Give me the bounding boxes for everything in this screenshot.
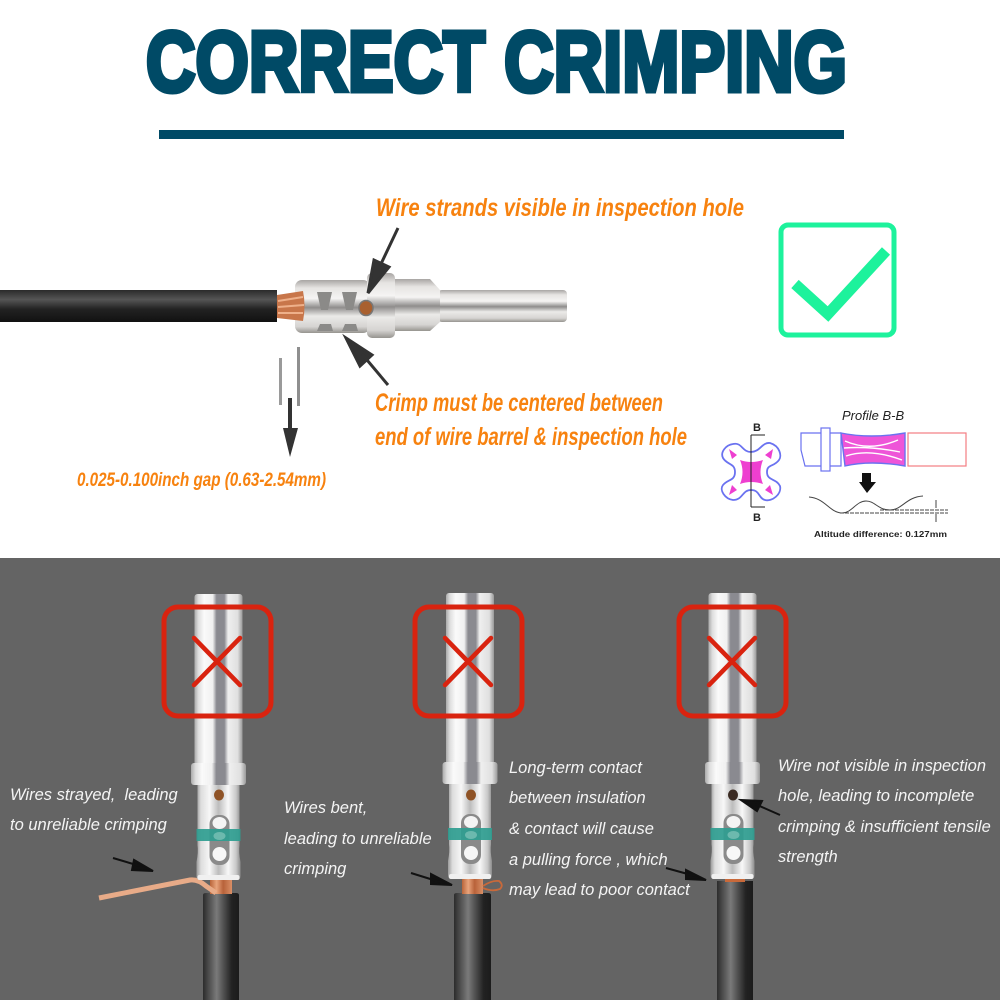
text: long-term contact: between insulation xyxy=(509,789,646,807)
arrow: missing strands xyxy=(741,800,780,815)
diagram: cross section: B xyxy=(753,512,761,524)
example 2: bent wires xyxy=(442,593,502,1000)
text: long-term contact: & contact will cause xyxy=(509,820,654,838)
icon: red cross 3 xyxy=(679,607,786,716)
hole xyxy=(728,790,738,800)
hole xyxy=(466,790,476,800)
pin xyxy=(438,290,567,322)
strands xyxy=(462,878,483,894)
hole xyxy=(214,790,224,800)
strands xyxy=(210,880,232,894)
diagram: down arrow xyxy=(859,473,876,493)
diagram: altitude label: Altitude difference: 0.127mm xyxy=(814,529,947,539)
stray wire xyxy=(99,880,216,898)
icon: red cross 2 xyxy=(415,607,522,716)
cable xyxy=(454,893,491,1000)
diagram: cross section: B xyxy=(753,422,761,434)
title: CORRECT CRIMPING xyxy=(146,15,847,110)
copper strands xyxy=(277,291,304,321)
annotation: crimp centered: end of wire barrel & inspection hole xyxy=(375,423,687,451)
text: wires bent: crimping xyxy=(284,860,347,878)
diagram: profile label: Profile B-B xyxy=(842,408,904,423)
diagram: longitudinal section xyxy=(801,428,966,471)
text: long-term contact: Long-term contact xyxy=(509,759,643,777)
connector xyxy=(705,593,760,879)
text: wires bent: Wires bent, xyxy=(284,799,367,817)
annotation: crimp centered: Crimp must be centered between xyxy=(375,389,663,417)
text: wires strayed: to unreliable crimping xyxy=(10,816,168,834)
annotation: inspection hole: Wire strands visible in inspection hole xyxy=(376,194,744,222)
connector xyxy=(442,593,498,879)
crimp indents xyxy=(317,292,358,331)
cable xyxy=(203,893,239,1000)
text: wires bent: leading to unreliable xyxy=(284,830,432,848)
text: wire not visible: hole, leading to incomplete xyxy=(778,787,974,805)
text: wire not visible: Wire not visible in inspection xyxy=(778,757,986,775)
gap marker xyxy=(279,347,300,457)
collar xyxy=(367,273,395,338)
icon: green check xyxy=(781,225,894,335)
strands xyxy=(725,877,745,882)
diagram: altitude curve xyxy=(809,496,948,522)
diagram: cross section xyxy=(722,422,780,524)
text: wire not visible: crimping & insufficient tensile xyxy=(778,818,991,836)
arrow to inspection hole xyxy=(368,228,398,293)
front sleeve xyxy=(395,279,440,331)
correct crimp connector xyxy=(0,273,567,338)
text: wires strayed: Wires strayed, leading xyxy=(10,786,178,804)
panel: incorrect crimping xyxy=(0,558,1000,1000)
example 1: strayed wires xyxy=(99,594,246,1000)
cable xyxy=(717,881,753,1000)
arrow: insulation gap xyxy=(666,868,706,880)
arrow: bent wire xyxy=(411,873,452,885)
example 3: hole empty xyxy=(705,593,760,1000)
text: long-term contact: may lead to poor contact xyxy=(509,881,691,899)
wire loop xyxy=(483,881,502,890)
text: long-term contact: a pulling force , which xyxy=(509,851,668,869)
icon: red cross 1 xyxy=(164,607,271,716)
inspection hole xyxy=(359,300,373,316)
connector xyxy=(191,594,246,880)
crimp barrel xyxy=(295,280,370,333)
arrow to crimp center xyxy=(346,338,388,385)
title underline xyxy=(159,130,844,139)
gap label: 0.025-0.100inch gap (0.63-2.54mm) xyxy=(77,470,326,491)
arrow: stray wire xyxy=(113,858,153,871)
cable xyxy=(0,290,277,322)
text: wire not visible: strength xyxy=(778,848,838,866)
